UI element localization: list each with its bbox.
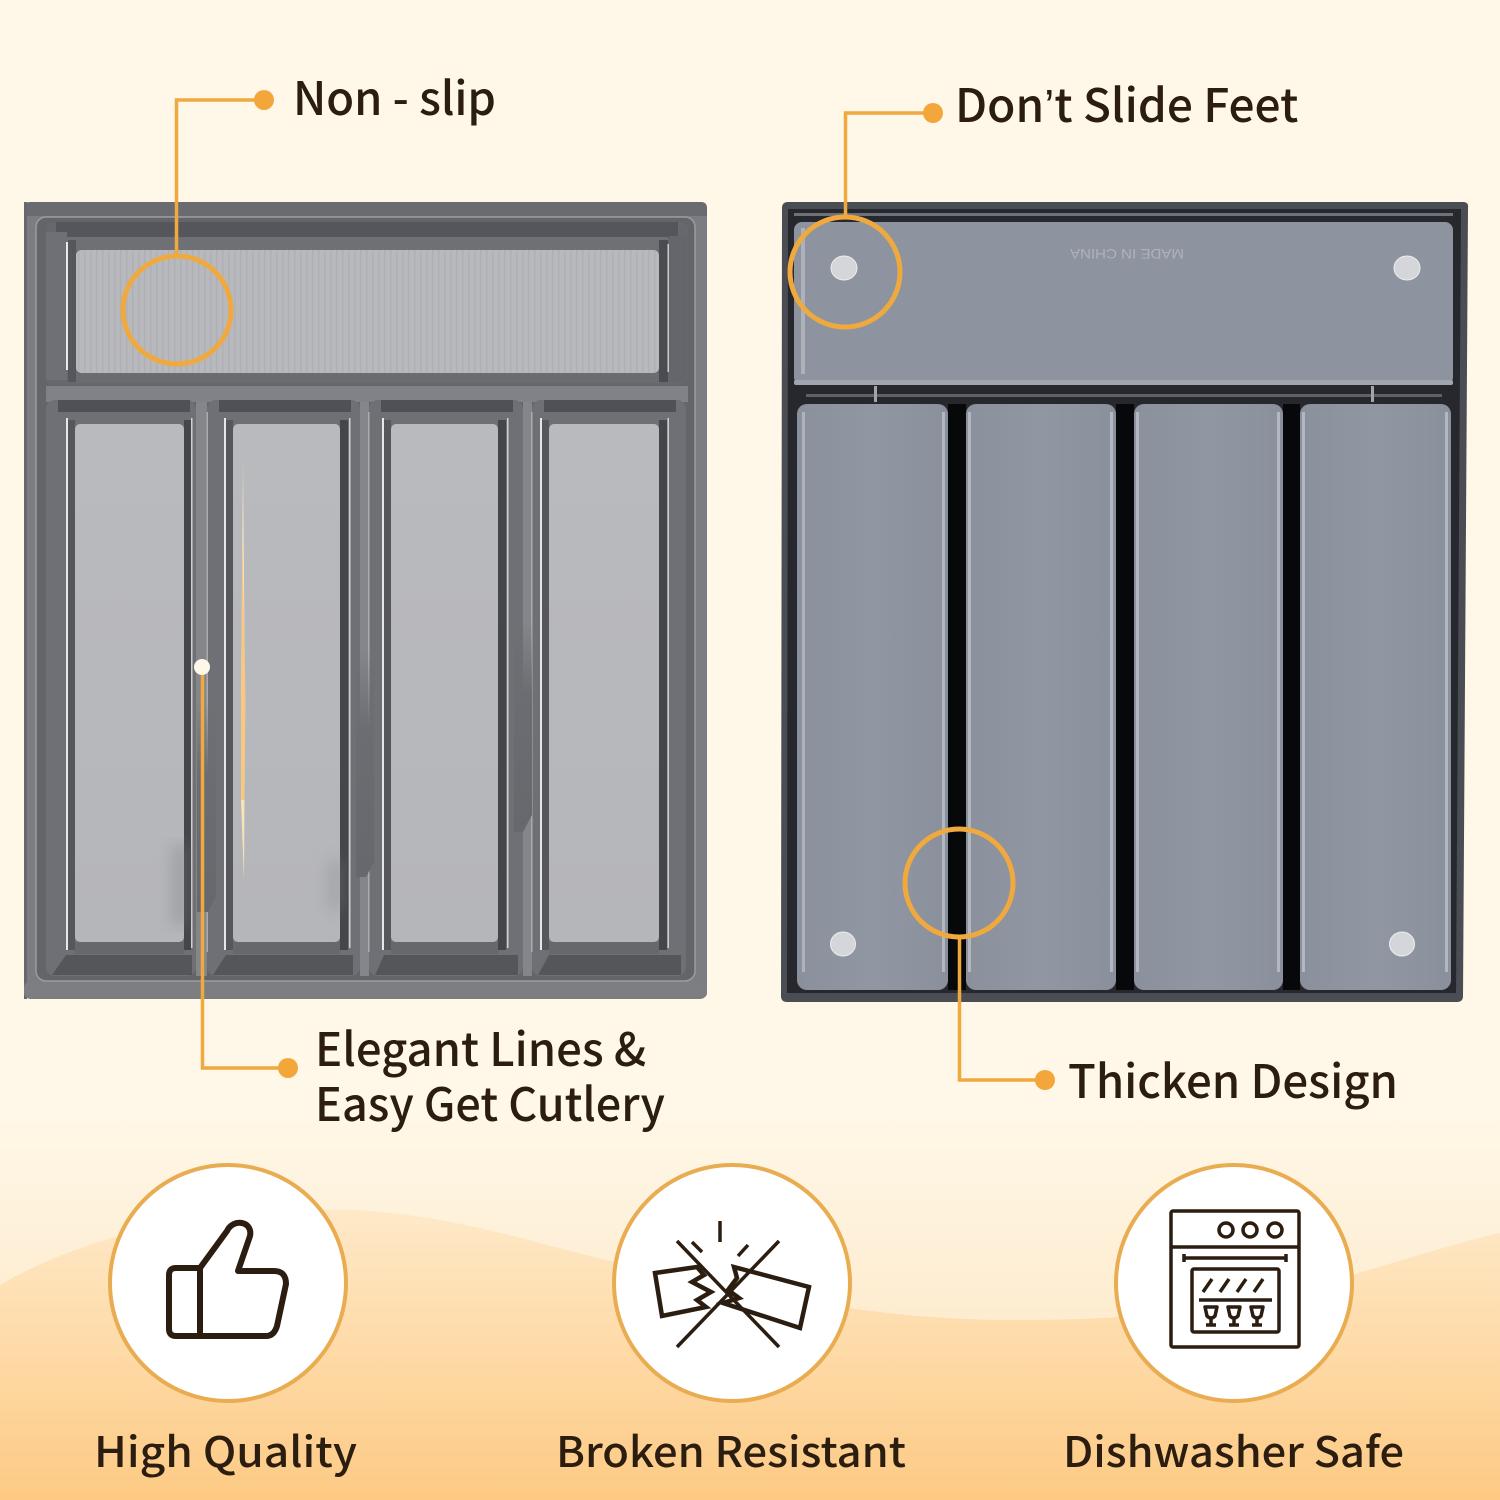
feature: high quality bbox=[94, 1165, 357, 1480]
feature: dishwasher safe: Dishwasher Safe bbox=[1063, 1419, 1404, 1480]
top compartment bbox=[46, 222, 688, 385]
callout: don't slide feet bbox=[790, 70, 1298, 327]
compartment 2 bbox=[207, 400, 360, 976]
bracket slot bbox=[806, 386, 1442, 402]
icon: dishwasher bbox=[1171, 1211, 1299, 1347]
left tray: top view bbox=[24, 202, 707, 999]
compartment 3 bbox=[369, 400, 523, 976]
feature: dishwasher safe bbox=[1063, 1165, 1404, 1480]
bar 3 bbox=[1134, 404, 1283, 990]
callout: thicken design: Thicken Design bbox=[1068, 1046, 1398, 1112]
bar gaps bbox=[948, 404, 1300, 990]
right tray: bottom view bbox=[781, 202, 1468, 1002]
icon: thumbs up bbox=[169, 1223, 286, 1336]
bar 1 bbox=[797, 404, 948, 990]
callout: elegant lines bbox=[194, 659, 665, 1135]
bar 2 bbox=[966, 404, 1116, 990]
floor shadows bbox=[174, 845, 340, 925]
divider rib bbox=[46, 386, 688, 402]
callout: non-slip: Non - slip bbox=[293, 63, 496, 129]
callout: elegant lines: Elegant Lines & bbox=[315, 1014, 646, 1080]
bar 4 bbox=[1300, 404, 1451, 990]
feature: broken resistant bbox=[556, 1165, 906, 1480]
top panel bbox=[794, 222, 1453, 385]
callout: non-slip bbox=[123, 63, 496, 364]
callout: don't slide feet: Don’t Slide Feet bbox=[955, 70, 1298, 136]
reflection highlight bbox=[241, 460, 246, 880]
feature: high quality: High Quality bbox=[94, 1419, 357, 1480]
non-slip mat bbox=[76, 250, 659, 373]
feature: broken resistant: Broken Resistant bbox=[556, 1419, 906, 1480]
mirrored mould text: MADE IN CHINA bbox=[1069, 246, 1184, 262]
dividers with finger notches bbox=[196, 402, 532, 976]
callout: thicken design bbox=[905, 829, 1398, 1112]
compartment 1 bbox=[46, 400, 196, 976]
callout: elegant lines: Easy Get Cutlery bbox=[315, 1069, 665, 1135]
icon: broken piece crossed out bbox=[655, 1221, 809, 1347]
rubber feet bbox=[830, 256, 1420, 956]
compartment 4 bbox=[532, 400, 686, 976]
